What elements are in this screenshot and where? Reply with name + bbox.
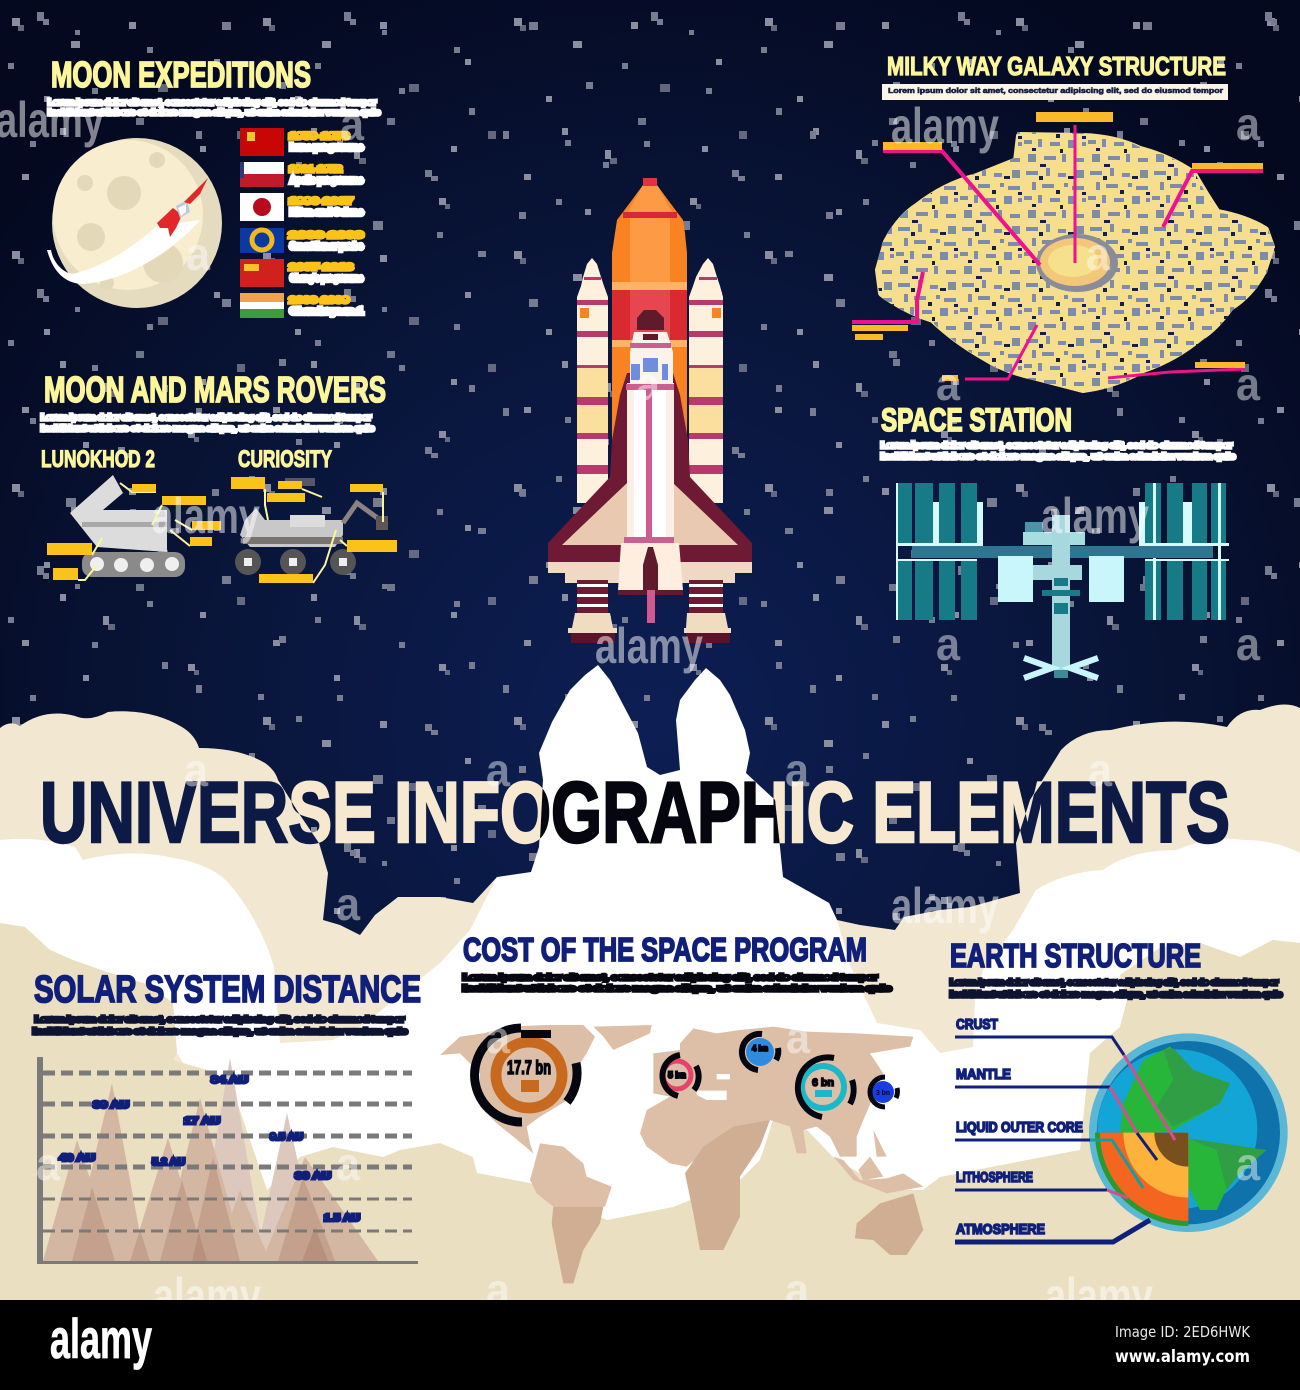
callouts: earth layer labels: LIQUID OUTER CORE bbox=[956, 1119, 1083, 1136]
label: curiosity: CURIOSITY bbox=[238, 446, 332, 473]
description text: Lorem ipsum dolor sit amet, consectetur adipiscing elit, sed do eiusmod tempor bbox=[48, 98, 376, 107]
description text: incididunt ut labore et dolore magna aliqua, ut enim ad minim veniam quis bbox=[950, 990, 1283, 999]
heading: SOLAR SYSTEM DISTANCE bbox=[34, 969, 421, 1011]
marker: united states budget bbox=[475, 1028, 577, 1122]
callouts: earth layer labels bbox=[955, 1016, 1175, 1242]
watermarks: a bbox=[786, 1011, 810, 1063]
watermarks: a bbox=[336, 1138, 360, 1190]
label: european union bbox=[289, 230, 363, 251]
description text bbox=[950, 978, 1283, 999]
callouts: earth layer labels: MANTLE bbox=[956, 1066, 1011, 1083]
watermarks: a bbox=[336, 878, 360, 930]
label: china bbox=[289, 262, 363, 283]
orbiter body bbox=[624, 310, 674, 543]
watermarks: a bbox=[1088, 744, 1112, 796]
chart: distance mountains: 40 AU bbox=[59, 1153, 95, 1164]
footer url: www.alamy.com bbox=[1115, 1347, 1250, 1367]
clouds: cream back layer bbox=[0, 704, 1300, 1300]
label: japan: Hiten and Selene bbox=[290, 207, 363, 217]
heading: MOON EXPEDITIONS bbox=[51, 54, 311, 95]
flag: soviet union bbox=[240, 128, 284, 156]
watermarks: alamy bbox=[1041, 488, 1149, 544]
description text: incididunt ut labore et dolore magna aliqua, ut enim ad minim veniam quis bbox=[881, 452, 1236, 461]
heading: SPACE STATION bbox=[881, 402, 1072, 438]
flag: european union bbox=[240, 228, 284, 253]
chart: distance mountains: 1.5 AU bbox=[324, 1213, 360, 1224]
marker: united states budget: 17.7 bn bbox=[507, 1058, 551, 1079]
watermarks: a bbox=[486, 744, 510, 796]
panel: moon expeditions bbox=[47, 54, 381, 318]
watermarks: alamy bbox=[153, 1268, 261, 1324]
watermarks: alamy bbox=[152, 488, 260, 544]
watermarks: a bbox=[1236, 98, 1260, 150]
left nozzle bbox=[568, 580, 617, 643]
watermarks: a bbox=[785, 744, 809, 796]
watermarks: alamy bbox=[891, 878, 999, 934]
chart: distance mountains: 30 AU bbox=[295, 1171, 331, 1182]
watermarks: a bbox=[785, 1264, 809, 1316]
callouts: earth layer labels: LITHOSPHERE bbox=[956, 1169, 1033, 1186]
footer logo: alamy bbox=[50, 1307, 152, 1370]
watermarks: a bbox=[186, 228, 210, 280]
heading: MOON AND MARS ROVERS bbox=[44, 369, 386, 410]
chart: distance mountains: 9.5 AU bbox=[270, 1132, 303, 1143]
footer image id: Image ID: 2ED6HWK bbox=[1115, 1323, 1251, 1341]
chart: distance mountains: 5.2 AU bbox=[152, 1157, 185, 1168]
label: soviet union bbox=[289, 131, 363, 152]
callouts: earth layer labels: CRUST bbox=[956, 1016, 998, 1033]
label: china: Chang'e programme bbox=[290, 273, 363, 283]
watermarks: alamy bbox=[891, 98, 999, 154]
clouds: white exhaust layer bbox=[0, 665, 1300, 1240]
panel: solar system distance bbox=[33, 969, 421, 1264]
watermarks: a bbox=[184, 744, 208, 796]
illustration: curiosity rover bbox=[231, 477, 397, 583]
orbiter wings bbox=[548, 373, 752, 583]
flag: japan bbox=[240, 193, 284, 221]
label: japan: 1990-2007 bbox=[289, 196, 353, 206]
callouts: galaxy labels bbox=[852, 112, 1263, 381]
illustration: space shuttle bbox=[548, 178, 752, 643]
chart: galaxy bbox=[875, 132, 1275, 393]
watermarks: alamy bbox=[595, 618, 703, 674]
watermarks: a bbox=[1236, 618, 1260, 670]
label: european union: Smart lunar probe bbox=[290, 241, 363, 251]
description text: incididunt ut labore et dolore magna aliqua, ut enim ad minim veniam quis bbox=[48, 108, 381, 117]
description text bbox=[881, 441, 1236, 461]
description text: incididunt ut labore et dolore magna aliqua, ut enim ad minim veniam quis bbox=[41, 424, 375, 433]
chart: world map bbox=[440, 1025, 923, 1283]
footer bar bbox=[0, 1300, 1300, 1390]
panel: milky way galaxy structure bbox=[852, 51, 1275, 393]
watermarks: a bbox=[636, 358, 660, 410]
heading: COST OF THE SPACE PROGRAM bbox=[463, 931, 867, 968]
description text bbox=[48, 98, 381, 117]
label: united states: 1961-1972 bbox=[289, 164, 342, 174]
panel: moon and mars rovers bbox=[41, 369, 397, 583]
description text: incididunt ut labore et dolore magna aliqua, ut enim ad minim veniam quis bbox=[33, 1027, 408, 1036]
marker: russia budget bbox=[742, 1034, 778, 1070]
chart: distance mountains: 84 AU bbox=[211, 1075, 248, 1086]
label: united states bbox=[289, 164, 363, 185]
description text bbox=[33, 1015, 408, 1036]
marker: russia budget: 4 bn bbox=[752, 1044, 768, 1053]
chart: distance mountains: 39 AU bbox=[93, 1100, 129, 1111]
external tank bbox=[612, 178, 687, 456]
label: india bbox=[289, 295, 363, 316]
watermarks: alamy bbox=[1045, 1268, 1153, 1324]
label: european union: 2003-2006 bbox=[289, 230, 363, 240]
right booster bbox=[689, 258, 723, 503]
flag: india bbox=[240, 293, 284, 318]
description text bbox=[463, 973, 892, 993]
flag: united states bbox=[240, 162, 284, 187]
watermarks: a bbox=[936, 618, 960, 670]
watermarks: a bbox=[340, 98, 364, 150]
watermarks: alamy bbox=[0, 92, 104, 148]
starfield bbox=[0, 0, 1300, 960]
chart: distance mountains: 17 AU bbox=[184, 1116, 220, 1127]
illustration: space station bbox=[896, 483, 1229, 678]
label: soviet union: 1959-1976 bbox=[289, 131, 349, 141]
label: japan bbox=[289, 196, 363, 217]
background: night sky bbox=[0, 0, 1300, 1000]
icon: moon with rocket bbox=[47, 138, 222, 308]
label: india: 2008-2009 bbox=[289, 295, 349, 305]
watermarks: a bbox=[486, 1264, 510, 1316]
right nozzle bbox=[684, 580, 731, 643]
marker: japan budget: 3 bn bbox=[876, 1090, 890, 1097]
description text: Lorem ipsum dolor sit amet, consectetur adipiscing elit, sed do eiusmod tempor bbox=[35, 1015, 404, 1024]
description text bbox=[41, 413, 375, 433]
heading: EARTH STRUCTURE bbox=[950, 937, 1201, 974]
marker: china budget bbox=[798, 1057, 854, 1117]
label: china: 2007-2013 bbox=[289, 262, 353, 272]
illustration: lunokhod rover bbox=[47, 475, 221, 580]
marker: europe budget bbox=[662, 1055, 699, 1096]
callouts: earth layer labels: ATMOSPHERE bbox=[956, 1221, 1045, 1238]
chart: distance mountains bbox=[37, 1057, 418, 1264]
description text: Lorem ipsum dolor sit amet, consectetur adipiscing elit, sed do eiusmod tempor bbox=[463, 973, 877, 982]
label: lunokhod 2: LUNOKHOD 2 bbox=[41, 446, 155, 473]
watermarks: a bbox=[1086, 228, 1110, 280]
marker: europe budget: 5 bn bbox=[668, 1070, 686, 1080]
panel: space station bbox=[881, 402, 1236, 678]
label: united states: Apollo programme bbox=[290, 175, 363, 185]
watermarks: a bbox=[1236, 1138, 1260, 1190]
label: india: Chandrayaan-1 bbox=[290, 306, 363, 316]
clouds: sand foreground layer bbox=[0, 923, 1300, 1300]
flag: china bbox=[240, 259, 284, 287]
description text: Lorem ipsum dolor sit amet, consectetur adipiscing elit, sed do eiusmod tempor bbox=[950, 978, 1278, 987]
watermarks: a bbox=[936, 358, 960, 410]
description text bbox=[882, 84, 1228, 100]
orbiter tail bbox=[618, 543, 683, 623]
marker: china budget: 6 bn bbox=[812, 1077, 834, 1089]
description text: Lorem ipsum dolor sit amet, consectetur adipiscing elit, sed do eiusmod tempor bbox=[41, 413, 371, 422]
chart: earth cross-section bbox=[1089, 1033, 1288, 1232]
watermarks: a bbox=[486, 1011, 510, 1063]
description text: Lorem ipsum dolor sit amet, consectetur adipiscing elit, sed do eiusmod tempor bbox=[881, 441, 1232, 450]
label: soviet union: Luna programme bbox=[290, 142, 363, 152]
title bbox=[43, 780, 1228, 844]
watermarks: a bbox=[36, 1138, 60, 1190]
description text: incididunt ut labore et dolore magna aliqua, ut enim ad minim veniam quis bbox=[463, 984, 892, 993]
panel: cost of the space program bbox=[440, 931, 923, 1283]
description text: Lorem ipsum dolor sit amet, consectetur adipiscing elit, sed do eiusmod tempor bbox=[888, 88, 1223, 95]
watermarks: a bbox=[1236, 358, 1260, 410]
marker: japan budget bbox=[870, 1077, 897, 1107]
panel: earth structure bbox=[950, 937, 1288, 1242]
left booster bbox=[577, 258, 608, 503]
